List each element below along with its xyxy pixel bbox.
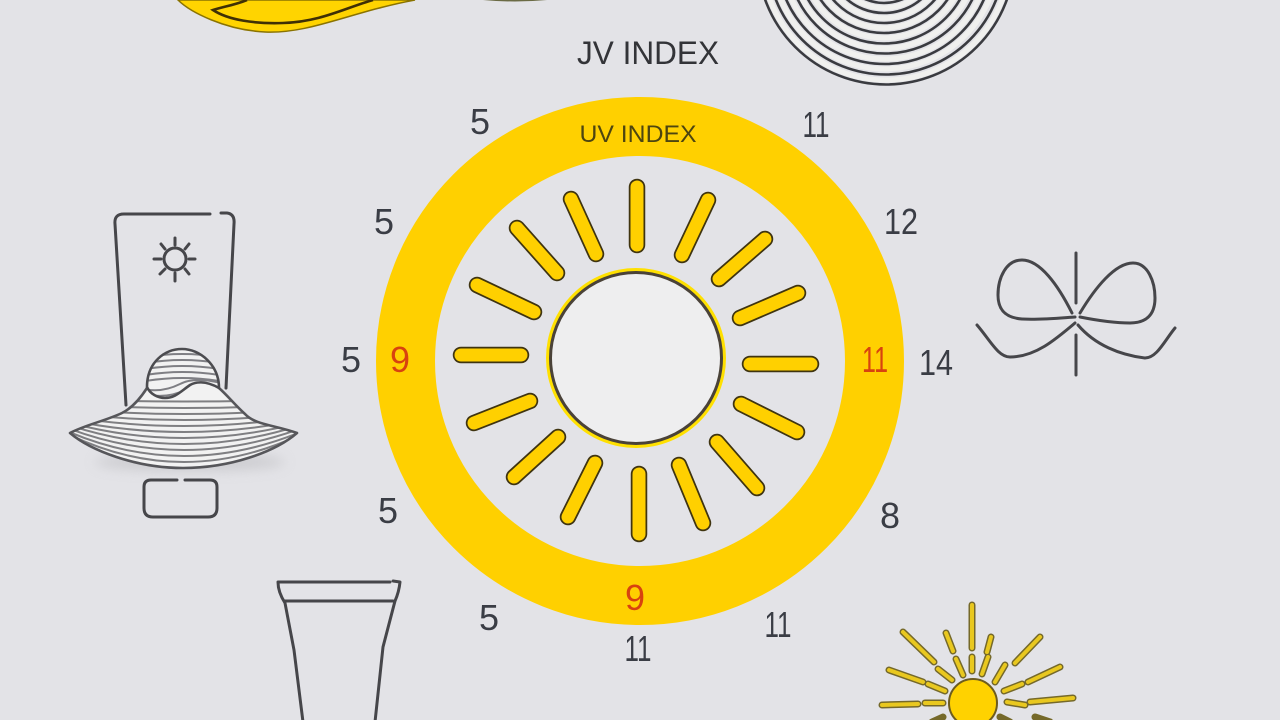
- hat shadow: [95, 453, 285, 471]
- hat brim: [60, 382, 310, 468]
- icon: small yellow sun: [882, 605, 1073, 720]
- decoration: concentric rings: [758, 0, 1014, 84]
- UV index dial: [341, 101, 953, 669]
- small sun symbol: [154, 238, 195, 281]
- outer scale numbers: 8: [880, 495, 900, 536]
- bottle cap: [144, 480, 217, 517]
- sun ray outlines: [882, 605, 1073, 720]
- bottle outline: [115, 213, 234, 405]
- red ring values: 9: [625, 577, 645, 618]
- red ring values: 11: [862, 339, 888, 380]
- outer scale numbers: 14: [919, 342, 953, 383]
- yellow ring: [406, 126, 874, 596]
- outer scale numbers: 11: [764, 604, 792, 645]
- sun disc: [949, 679, 997, 720]
- outer scale numbers: 5: [378, 490, 398, 531]
- outer scale numbers: 11: [624, 628, 652, 669]
- ring label: UV INDEX: UV INDEX: [580, 121, 696, 148]
- sun ray fills: [882, 605, 1073, 705]
- icon: sunscreen tube: [278, 581, 400, 720]
- decoration: yellow wave: [178, 0, 547, 32]
- outer scale numbers: [341, 101, 953, 669]
- outer scale numbers: 5: [479, 597, 499, 638]
- red ring values: [390, 339, 888, 618]
- outer scale numbers: 11: [802, 104, 830, 145]
- centre disc: [546, 268, 726, 448]
- sun rays: [461, 187, 811, 534]
- hat crown: [140, 349, 225, 398]
- heading: JV INDEX: JV INDEX: [577, 35, 719, 71]
- icon: ribbon bow: [977, 253, 1175, 375]
- outer scale numbers: 5: [374, 201, 394, 242]
- outer scale numbers: 5: [341, 339, 361, 380]
- icon: sunscreen bottle with sun and sun hat: [60, 213, 310, 517]
- outer scale numbers: 12: [884, 201, 918, 242]
- red ring values: 9: [390, 339, 410, 380]
- outer scale numbers: 5: [470, 101, 490, 142]
